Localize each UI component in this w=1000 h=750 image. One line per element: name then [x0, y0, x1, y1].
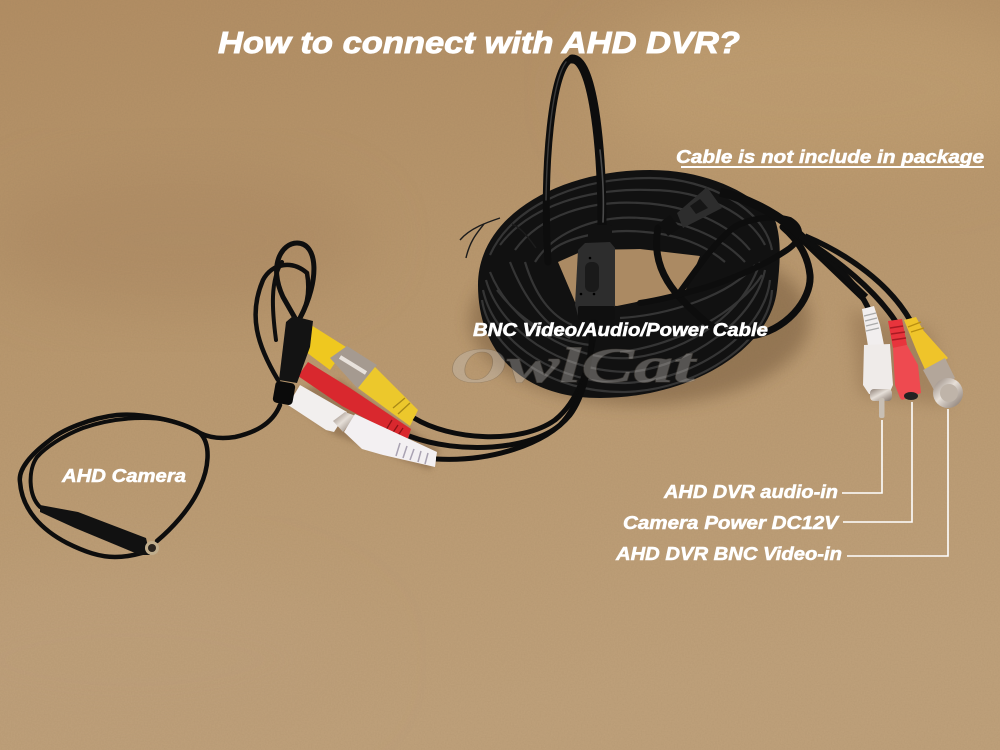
label: power with leader line: Camera Power DC12V [623, 513, 840, 533]
label: audio-in with leader line [663, 420, 882, 502]
watermark: OwlCat [450, 337, 698, 393]
title: How to connect with AHD DVR? [218, 25, 740, 60]
label: audio-in with leader line: AHD DVR audio-in [663, 482, 838, 502]
top cable loop [546, 59, 603, 262]
left yellow BNC plug [306, 325, 418, 426]
left inline black connector [272, 316, 313, 406]
stray wire ends [460, 218, 536, 258]
label: power with leader line [623, 402, 912, 533]
cable coil [460, 170, 780, 398]
second connector and loops [640, 187, 865, 336]
camera connector barrel [40, 505, 159, 555]
left white plugs [288, 385, 437, 467]
label: video-in with leader line [615, 409, 948, 564]
cables from left plugs to inline connector [409, 320, 596, 459]
label: BNC cable: BNC Video/Audio/Power Cable [473, 320, 768, 340]
label: video-in with leader line: AHD DVR BNC Video-in [615, 544, 842, 564]
camera pigtail cable [20, 405, 280, 557]
inline connector on coil [575, 225, 615, 320]
right red power plug [888, 319, 921, 400]
right white RCA plug [862, 306, 893, 418]
right yellow BNC plug [904, 317, 963, 408]
right bundle cables [800, 236, 910, 322]
left red plug [298, 362, 411, 441]
small cable loops above left connector [256, 243, 314, 380]
note: cable not included: Cable is not include in package [676, 147, 984, 167]
shadows under the cables [280, 235, 950, 470]
label: AHD camera: AHD Camera [61, 466, 186, 486]
